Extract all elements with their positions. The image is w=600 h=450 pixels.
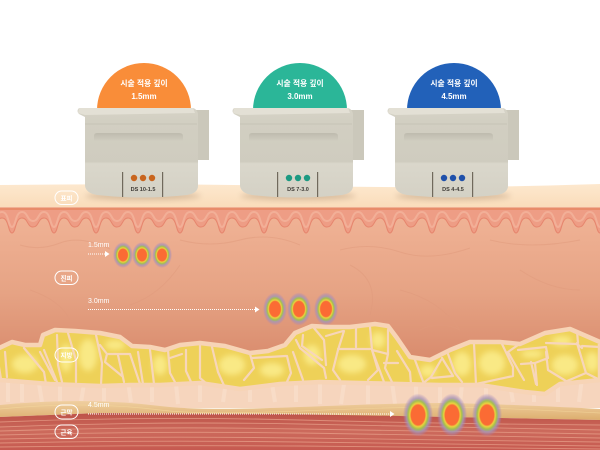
depth dome	[97, 63, 191, 110]
layer: muscle	[0, 413, 600, 450]
skin cross-section	[0, 184, 600, 450]
depth marker: 1.5mm	[88, 242, 110, 257]
label: fat	[55, 348, 78, 362]
cartridge: 4.5mm blue: DS 4-4.5	[442, 187, 464, 193]
layer: fat	[0, 324, 600, 394]
cartridge: 3.0mm green	[232, 63, 364, 200]
layer: epidermis	[0, 184, 600, 212]
cartridge: 3.0mm green: DS 7-3.0	[287, 187, 309, 193]
heat points: 3.0mm	[263, 292, 338, 326]
depth dome	[407, 63, 501, 110]
heat points: 1.5mm	[113, 242, 172, 268]
cartridge: 1.5mm orange: 시술 적용 깊이	[120, 78, 168, 88]
label: dermis: 진피	[61, 273, 72, 282]
depth marker: 4.5mm: 4.5mm	[88, 402, 110, 409]
dermis fibres	[20, 237, 580, 330]
label: dermis	[55, 271, 78, 284]
cartridge: 4.5mm blue	[388, 63, 519, 200]
cartridge: 3.0mm green: 3.0mm	[287, 92, 313, 101]
label: fat: 지방	[61, 350, 72, 360]
layer: dermis	[0, 208, 600, 378]
label: fascia	[55, 405, 78, 419]
label: muscle	[55, 425, 78, 438]
depth marker: 3.0mm: 3.0mm	[88, 298, 110, 305]
depth marker: 1.5mm: 1.5mm	[88, 242, 110, 249]
depth marker: 3.0mm	[88, 298, 260, 312]
layer: connective tissue	[0, 372, 600, 408]
layer labels	[55, 191, 78, 438]
label: epidermis: 표피	[61, 193, 72, 202]
depth dome	[253, 63, 347, 110]
label: muscle: 근육	[61, 428, 72, 436]
label: epidermis	[55, 191, 78, 204]
cartridge: 1.5mm orange	[78, 63, 209, 200]
dermal ridge wave	[0, 208, 600, 233]
cartridge: 4.5mm blue: 시술 적용 깊이	[430, 78, 478, 88]
depth marker: 4.5mm	[88, 402, 394, 417]
cartridge: 1.5mm orange: DS 10-1.5	[131, 187, 155, 193]
cartridge: 3.0mm green: 시술 적용 깊이	[276, 78, 324, 88]
fat outline	[0, 324, 600, 394]
layer: fascia	[0, 401, 600, 420]
fat cell dividers	[5, 327, 600, 390]
fat highlights	[12, 332, 599, 377]
cartridge: 4.5mm blue: 4.5mm	[441, 92, 467, 101]
heat points: 4.5mm	[403, 394, 502, 436]
label: fascia: 근막	[61, 408, 72, 416]
cartridge: 1.5mm orange: 1.5mm	[131, 92, 157, 101]
